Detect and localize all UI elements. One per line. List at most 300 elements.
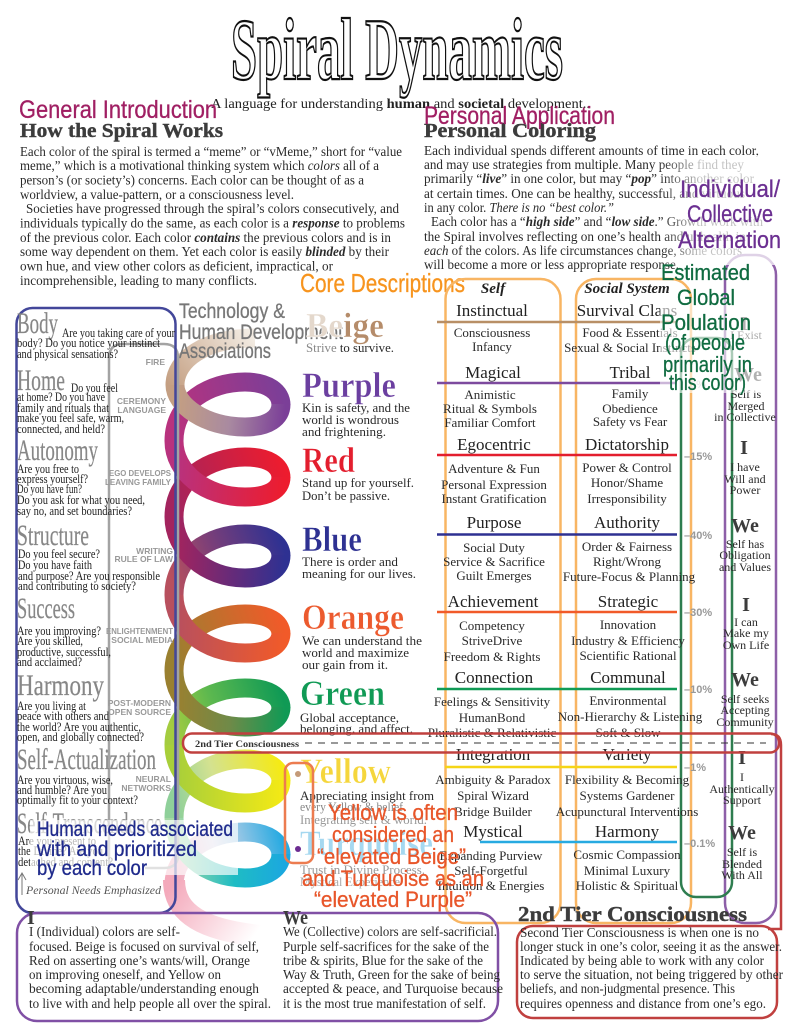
list: individual and collective alternation: Make my [723, 626, 769, 640]
text block: We colors: We (Collective) colors are self-sacrificial. [283, 924, 497, 940]
table: self column: Self [481, 281, 507, 297]
panel: global population frame [681, 338, 732, 897]
need: body: Are you taking care of your [62, 326, 176, 340]
table: social system column: Tribal [610, 363, 651, 382]
panel: second tier consciousness [517, 902, 783, 1018]
heading: estimated global population: Polulation [661, 310, 751, 335]
panel outline [16, 308, 176, 913]
chart labels: population percentages: –30% [684, 607, 712, 619]
heading: second tier: 2nd Tier Consciousness [518, 902, 747, 926]
table: social system column: Holistic & Spiritual [576, 878, 679, 893]
table: social system column: Survival Clans [577, 301, 677, 320]
text block: personal coloring body [424, 143, 763, 272]
heading: core descriptions: Core Descriptions [300, 268, 465, 298]
need: self-actualization: optimally fit to your context? [17, 793, 138, 807]
callout bracket: yellow and turquoise markers [285, 763, 313, 863]
need: self-transcendence: Are you present to [18, 834, 96, 848]
table: self column [428, 281, 556, 893]
list: individual and collective alternation: I have [730, 460, 760, 474]
need: structure: Do you have faith [18, 558, 93, 572]
need: structure: Do you feel secure? [18, 547, 100, 561]
chart labels: population percentages: –1% [684, 762, 706, 774]
color: purple: world is wondrous [302, 412, 399, 427]
text block: introduction body: meme,” which is a motivational thinking system which colors all of a [20, 158, 379, 173]
need: home: make you feel safe, warm, [17, 411, 124, 425]
text block: second tier: longer stuck in one’s color, seeing it as the answer. [520, 939, 782, 954]
need: harmony: open, and globally connected? [17, 730, 144, 744]
list: individual and collective alternation: Obligation [719, 548, 771, 562]
list: individual and collective alternation: With All [721, 868, 763, 882]
color: orange: world and maximize [302, 645, 409, 660]
table: social system column: Power & Control [582, 460, 672, 475]
need: harmony [17, 669, 144, 744]
callout: yellow and turquoise: “elevated Purple” [314, 887, 472, 912]
table: social system column: Authority [594, 513, 661, 532]
table: social system column: Communal [590, 668, 666, 687]
list: individual and collective alternation: I [740, 437, 748, 459]
text block: We colors: it is the most true manifestation of self. [283, 996, 486, 1011]
technology labels: OPEN SOURCE [108, 707, 171, 717]
need: self-actualization: and humble? Are you [17, 783, 108, 797]
grey bracket [109, 344, 178, 875]
text block: introduction body: individuals typically do the same, as each color is a response to problems [20, 216, 405, 230]
heading: human needs: by each color [37, 857, 147, 880]
color: red: Don’t be passive. [302, 488, 390, 503]
text block: introduction body: Each color of the spiral is termed a “meme” or “vMeme,” short for “value [20, 144, 402, 159]
callout: yellow and turquoise: considered an [332, 822, 454, 847]
color: yellow [300, 751, 434, 827]
table: social system column: Safety vs Fear [593, 414, 668, 429]
text block: introduction body: some way dependent on them. Yet each color is easily blinded by their [20, 244, 389, 259]
list: individual and collective alternation: Merged [727, 399, 765, 413]
panel: personal application [424, 102, 763, 272]
table: self column: Consciousness [454, 325, 530, 340]
technology labels: SOCIAL MEDIA [111, 635, 173, 645]
need: autonomy: Autonomy [17, 434, 98, 467]
color: red: Stand up for yourself. [302, 475, 414, 490]
need: self-transcendence: Self-Transcendence [17, 807, 162, 840]
heading: personal application: Personal Application [424, 102, 615, 130]
table: social system column: Irresponsibility [587, 491, 667, 506]
color: green: Green [300, 673, 385, 713]
heading: technology and human development associations: Associations [179, 340, 271, 363]
list: individual and collective alternation: Authentically [709, 782, 775, 796]
heading: estimated global population: Estimated [661, 260, 750, 285]
list: individual and collective alternation: I [740, 770, 744, 784]
technology labels: WRITING [136, 546, 173, 556]
table: self column: Bridge Builder [454, 804, 532, 819]
table: self column: Adventure & Fun [448, 461, 540, 476]
need: structure: and purpose? Are you responsible [18, 569, 160, 583]
fade overlay [30, 820, 238, 875]
need: structure: Structure [17, 519, 89, 552]
technology labels: NETWORKS [121, 783, 171, 793]
list: individual and collective alternation: We [734, 364, 762, 386]
list: individual and collective alternation: Accepting [720, 703, 770, 717]
list: individual and collective alternation: and Values [719, 560, 771, 574]
list: individual and collective alternation: Own Life [723, 638, 769, 652]
heading: estimated global population: (of people [665, 330, 745, 355]
table: self column: Instinctual [456, 301, 528, 320]
arrow: needs direction [18, 873, 26, 895]
table: self column: Connection [455, 668, 534, 687]
heading: individual collective alternation: Individual/ [680, 176, 780, 203]
heading: estimated global population: Global [677, 285, 735, 310]
color: purple: Kin is safety, and the [302, 400, 410, 415]
need: home: Do you feel [71, 381, 118, 395]
need: structure [17, 519, 160, 593]
table: self column: Ambiguity & Paradox [435, 772, 551, 787]
table: self column: Expanding Purview [440, 848, 543, 863]
text block: personal coloring body: in any color. There is no “best color.” [424, 200, 614, 215]
color: purple: Purple [302, 365, 396, 405]
right bracket [768, 734, 781, 929]
text block: introduction body: of the previous color. Each color contains the previous colors and is in [20, 230, 391, 245]
table: self column: Egocentric [457, 435, 531, 454]
text block: personal coloring body: each of the colors. As life circumstances change, some colors [424, 243, 742, 258]
table: social system column: Cosmic Compassion [573, 847, 681, 862]
table: social system column: Right/Wrong [593, 554, 662, 569]
need: body: body? Do you notice your instinct [17, 336, 160, 350]
chart labels: population percentages [684, 379, 715, 850]
list: individual and collective alternation: Self is [727, 845, 757, 859]
table: self column: Magical [465, 363, 521, 382]
table: self column: Competency [459, 618, 525, 633]
table: self column: Guilt Emerges [456, 568, 532, 583]
fade overlay: population heading [660, 298, 770, 393]
heading: individual collective alternation [678, 176, 781, 254]
callout: yellow and turquoise: Yellow is often [328, 800, 458, 825]
need: home: at home? Do you have [17, 390, 105, 404]
need: autonomy [17, 434, 145, 518]
table: social system column: Social System [584, 281, 670, 297]
table: social system column: Food & Essentials [582, 325, 678, 340]
heading: estimated global population [661, 260, 752, 395]
color: turquoise: Trust in Divine Process. [300, 862, 425, 877]
color: blue [302, 519, 416, 581]
table: self column: Feelings & Sensitivity [434, 694, 551, 709]
color: orange: Orange [302, 597, 404, 637]
need: success: Are you improving? [17, 624, 101, 638]
callout: yellow and turquoise: and Turquoise as an [302, 866, 484, 891]
fade overlay: top right [660, 155, 794, 265]
need: body [17, 307, 176, 361]
text block: introduction body: incomprehensible, leading to many conflicts. [20, 273, 257, 288]
heading: how the spiral works: How the Spiral Works [20, 120, 223, 142]
need: structure: and contributing to society? [18, 579, 136, 593]
panel outline [17, 913, 498, 1021]
text block: personal coloring body: Each individual spends different amounts of time in each color, [424, 143, 759, 158]
heading: estimated global population: this color) [669, 370, 746, 395]
list: individual and collective alternation: Power [730, 483, 760, 497]
list: individual and collective alternation: Will and [724, 472, 766, 486]
text block: I colors: Red on asserting one’s wants/will, Orange [29, 953, 250, 968]
need: home: connected, and held? [17, 422, 105, 436]
table: self column: Animistic [464, 387, 516, 402]
table: self column: Mystical [463, 822, 523, 841]
technology labels: LANGUAGE [117, 405, 166, 415]
panel: technology associations [105, 300, 343, 875]
table: social system column: Soft & Slow [595, 725, 661, 740]
table: self column: Social Duty [463, 540, 525, 555]
heading: technology and human development associations [179, 300, 343, 363]
table: social system column: Industry & Efficiency [571, 633, 685, 648]
need: home: family and rituals that [17, 401, 109, 415]
table: self column: HumanBond [459, 710, 526, 725]
color: green [300, 673, 413, 736]
need: harmony: Harmony [17, 669, 104, 702]
text block: second tier [520, 925, 783, 1011]
text block: We colors: tribe & spirits, Blue for the sake of the [283, 953, 483, 968]
text block: second tier: to serve the situation, not being triggered by other [520, 967, 783, 982]
text block: personal coloring body: the Spiral involves reflecting on one’s health and unhealth in [424, 229, 746, 244]
heading: individual collective alternation: Alternation [678, 227, 781, 254]
need: self-actualization [17, 743, 156, 807]
text block: second tier: Second Tier Consciousness is when one is no [520, 925, 759, 940]
need: harmony: the world? Are you authentic, [17, 720, 141, 734]
heading: technology and human development associations: Technology & [179, 300, 285, 323]
color: turquoise [300, 823, 433, 889]
text block: We colors: accepted & peace, and Turquoise because [283, 981, 503, 996]
dashed divider [305, 742, 766, 744]
heading: individual collective alternation: Collective [687, 201, 773, 228]
text block: I colors: focused. Beige is focused on survival of self, [29, 939, 259, 954]
table: self column: Self-Forgetful [454, 863, 528, 878]
table: self column: Service & Sacrifice [443, 554, 545, 569]
table: social system column: Systems Gardener [580, 788, 675, 803]
table: social system column: Honor/Shame [591, 475, 663, 490]
table: self column: Personal Expression [441, 477, 547, 492]
panel: human needs [16, 307, 238, 913]
color: turquoise: Mystical Experience [300, 874, 400, 889]
list: individual and collective alternation: Self has [726, 537, 764, 551]
color: red [302, 440, 414, 503]
second tier band [183, 734, 781, 929]
table: self column: Spiral Wizard [457, 788, 529, 803]
list: individual and collective alternation: I can [734, 615, 758, 629]
panel: general introduction [19, 96, 405, 288]
color: blue: meaning for our lives. [302, 566, 416, 581]
table: social system column: Sexual & Social Instincts [564, 340, 696, 355]
color: green: belonging, and affect. [300, 721, 413, 736]
need: self-transcendence: detached and content? [18, 855, 113, 869]
list: individual and collective alternation: I Exist [730, 328, 762, 342]
heading: personal coloring: Personal Coloring [424, 120, 596, 142]
text block: introduction body: own hue, and view other colors as deficient, impractical, or [20, 258, 333, 274]
text block: I colors [29, 924, 271, 1011]
text block: second tier: Indicated by being able to work with any color [520, 953, 764, 968]
chart labels: population percentages: –15% [684, 451, 712, 463]
need: success: productive, successful, [17, 645, 111, 659]
text block: We colors: Way & Truth, Green for the sake of being [283, 967, 500, 982]
table: self column: Ritual & Symbols [443, 401, 537, 416]
list: individual and collective alternation: Community [716, 715, 774, 729]
technology labels: CEREMONY [117, 396, 166, 406]
text block: personal coloring body: and may use strategies from multiple. Many people find they [424, 157, 744, 172]
text block: introduction body: Societies have progressed through the spiral’s colors consecutively, and [26, 201, 399, 216]
need: autonomy: Do you ask for what you need, [17, 493, 145, 507]
need: success [17, 592, 111, 669]
color: turquoise: Turquoise [300, 823, 433, 863]
panel: individual and we explanations [17, 907, 503, 1021]
table: self column: StriveDrive [462, 633, 523, 648]
text block: We colors [283, 924, 503, 1011]
list: individual and collective alternation: Self is [731, 387, 761, 401]
list: individual and collective alternation: We [731, 515, 759, 537]
table: social system column: Harmony [595, 822, 660, 841]
color: yellow: Yellow [300, 751, 391, 791]
table: social system column: Order & Fairness [582, 539, 672, 554]
table: social system column: Strategic [598, 592, 659, 611]
list: individual and collective alternation: Blended [722, 857, 762, 871]
table: social system column: Family [612, 386, 649, 401]
list: individual and collective alternation: We [728, 822, 756, 844]
color level rules [437, 322, 677, 842]
callout: yellow and turquoise: “elevated Beige” [317, 844, 466, 869]
need: autonomy: Do you have fun? [17, 482, 82, 496]
table: self column: Freedom & Rights [444, 649, 540, 664]
table: self column: Pluralistic & Relativistic [428, 725, 556, 740]
heading: human needs: Human needs associated [37, 818, 233, 841]
table: social system column: Acupunctural Interventions [556, 804, 698, 819]
need: autonomy: Are you free to [17, 462, 79, 476]
technology labels: NEURAL [136, 774, 171, 784]
list: individual and collective alternation: I [742, 594, 750, 616]
table: social system column: Future-Focus & Planning [563, 569, 696, 584]
need: self-transcendence [17, 807, 162, 869]
table: social system column: Obedience [602, 401, 658, 416]
table: social system column [556, 281, 703, 893]
list: individual and collective alternation: I [740, 313, 748, 335]
panel: social system column frame [576, 279, 691, 923]
heading: technology and human development associations: Human Development [179, 321, 343, 344]
text block: personal coloring body: at certain times. One can be healthy, successful, and virtuous [424, 186, 745, 201]
table: social system column: Dictatorship [585, 435, 669, 454]
table: self column: Instant Gratification [441, 491, 547, 506]
technology labels [105, 357, 174, 793]
text block: I colors: on improving oneself, and Yellow on [29, 967, 221, 982]
table: social system column: Innovation [600, 617, 657, 632]
band outline [183, 734, 779, 752]
text block: introduction body: worldview, a value-pattern, or a consciousness level. [20, 187, 294, 202]
list: individual and collective alternation: Support [723, 793, 762, 807]
color: yellow: Appreciating insight from [300, 788, 434, 803]
need: autonomy: express yourself? [17, 472, 88, 486]
need: home [17, 364, 124, 436]
table: social system column: Variety [602, 745, 652, 764]
need: success: and acclaimed? [17, 655, 82, 669]
need: body: Body [17, 307, 58, 340]
need: self-actualization: Self-Actualization [17, 743, 156, 776]
table: self column: Achievement [448, 592, 539, 611]
need: self-transcendence: the Divine? Are you [18, 844, 104, 858]
band label: 2nd Tier Consciousness [195, 739, 300, 749]
table: social system column: Scientific Rational [579, 648, 677, 663]
panel: individual collective frame [725, 255, 776, 923]
panel: self column frame [446, 279, 560, 923]
table: self column: Purpose [467, 513, 521, 532]
need: harmony: peace with others and [17, 709, 110, 723]
color: orange: We can understand the [302, 633, 422, 648]
need: body: and physical sensations? [17, 347, 118, 361]
panel: core descriptions [300, 268, 465, 889]
text block: second tier: requires openness and distance from one’s ego. [520, 996, 766, 1011]
list: individual and collective alternation: I [738, 747, 746, 769]
color: orange: our gain from it. [302, 657, 388, 672]
text block: personal coloring body: will become a more or less appropriate response. [424, 257, 679, 272]
color: blue: Blue [302, 519, 362, 559]
caption: personal needs emphasized: Personal Needs Emphasized [25, 883, 162, 897]
technology labels: FIRE [146, 357, 165, 367]
chart labels: population percentages: –0.1% [684, 838, 715, 850]
list: individual and collective alternation [709, 313, 776, 882]
spiral graphic [174, 338, 281, 936]
need: success: Are you skilled, [17, 634, 83, 648]
color: green: Global acceptance, [300, 710, 399, 725]
text block: personal coloring body: Each color has a “high side” and “low side.” Growth work with [431, 214, 763, 229]
list: individual and collective alternation: Self seeks [721, 692, 769, 706]
subtitle: A language for understanding human and societal development.. [211, 97, 590, 112]
chart labels: population percentages: 5% [690, 379, 706, 391]
panel outline [517, 926, 777, 1018]
table: self column: Infancy [472, 339, 512, 354]
color: purple [302, 365, 410, 439]
need: autonomy: say no, and set boundaries? [17, 504, 132, 518]
text block: introduction body [20, 144, 405, 288]
color: beige: Beige [306, 306, 384, 345]
heading: human needs: with and prioritized [36, 838, 197, 861]
list: individual and collective alternation: in Collective [714, 410, 776, 424]
table: self column: Intuition & Energies [438, 878, 544, 893]
heading: I: I [27, 907, 35, 929]
text block: personal coloring body: primarily “live” in one color, but may “pop” into another color [424, 171, 754, 186]
table: social system column: Non-Hierarchy & Listening [558, 709, 703, 724]
technology labels: ENLIGHTENMENT [106, 626, 174, 636]
table: self column: Familiar Comfort [444, 415, 536, 430]
heading: human needs [36, 818, 233, 880]
text block: second tier: beliefs, and non-judgmental presence. This [520, 981, 735, 996]
chart labels: population percentages: –10% [684, 684, 712, 696]
table: social system column: Flexibility & Becoming [565, 772, 690, 787]
need: home: Home [17, 364, 65, 397]
table: social system column: Minimal Luxury [584, 863, 671, 878]
heading: general introduction: General Introduction [19, 96, 217, 124]
color: beige: Strive to survive. [306, 340, 394, 355]
color: red: Red [302, 440, 355, 480]
chart labels: population percentages: –40% [684, 530, 712, 542]
heading: estimated global population: primarily in [663, 352, 752, 377]
color: blue: There is order and [302, 554, 398, 569]
table: self column: Integration [456, 745, 531, 764]
need: success: Success [17, 592, 75, 625]
technology labels: POST-MODERN [108, 698, 171, 708]
text block: introduction body: person’s (or society’s) concerns. Each color can be thought of as a [20, 172, 364, 188]
technology labels: EGO DEVELOPS [109, 468, 171, 478]
text block: I colors: I (Individual) colors are self- [29, 924, 180, 940]
table: social system column: Environmental [589, 693, 667, 708]
technology labels: LEAVING FAMILY [105, 477, 171, 487]
text block: I colors: to live with and help people all over the spiral. [29, 996, 271, 1011]
text block: I colors: becoming adaptable/understanding enough [29, 981, 259, 996]
color: yellow: every Yellow & belief [300, 799, 404, 814]
color: orange [302, 597, 422, 672]
text block: We colors: Purple self-sacrifices for the sake of the [283, 939, 489, 954]
color: purple: and frightening. [302, 424, 386, 439]
list: individual and collective alternation: We [731, 669, 759, 691]
need: self-actualization: Are you virtuous, wise, [17, 773, 113, 787]
color: yellow: Integrating self & world. [300, 812, 427, 827]
heading: We: We [283, 907, 308, 929]
